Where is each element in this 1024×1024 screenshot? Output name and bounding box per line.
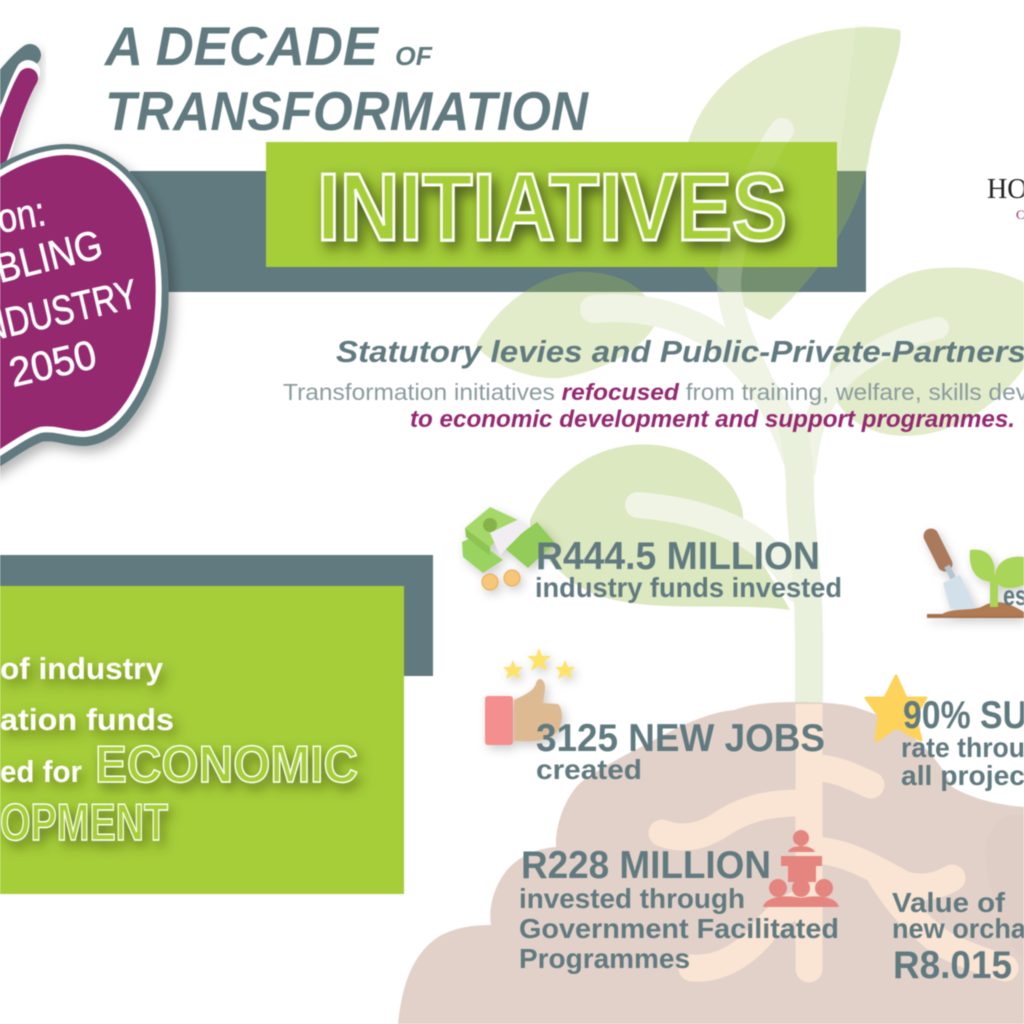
panel text xyxy=(0,651,358,852)
subtitle text xyxy=(283,334,1024,433)
icon: star xyxy=(866,676,926,741)
logo fragment xyxy=(987,174,1024,222)
stat: government programmes: R228 MILLION xyxy=(521,844,771,887)
apple text: 2050 xyxy=(5,331,101,396)
title: A Decade of Transformation xyxy=(103,15,589,142)
stat: industry funds: R444.5 MILLION xyxy=(536,535,820,578)
subtitle text: Transformation initiatives refocused from training, welfare, skills dev xyxy=(283,379,1024,405)
icon: thumbs up with stars xyxy=(485,648,575,745)
stat: success rate: all projec xyxy=(901,760,1024,791)
stat: new orchards value: R8.015 xyxy=(893,944,1012,987)
panel text: OPMENT xyxy=(0,794,168,852)
icon: money xyxy=(462,507,555,590)
stat: success rate xyxy=(901,694,1024,791)
panel text: ed for xyxy=(0,754,82,789)
stat: new orchards value: Value of xyxy=(892,887,1006,918)
stat: government programmes: Programmes xyxy=(519,943,690,974)
apple body xyxy=(0,154,159,462)
title: A Decade of Transformation: TRANSFORMATION xyxy=(105,80,589,142)
stat: new jobs: created xyxy=(536,754,642,785)
stat: industry funds: industry funds invested xyxy=(535,572,842,603)
subtitle text: Statutory levies and Public-Private-Partners xyxy=(336,334,1024,369)
banner: initiatives xyxy=(130,142,866,292)
panel text: of industry xyxy=(0,651,164,686)
stat: industry funds xyxy=(535,535,842,603)
stat: government programmes xyxy=(519,844,839,974)
stat: new jobs xyxy=(536,717,825,785)
soil mound xyxy=(398,702,1024,1024)
subtitle text: to economic development and support programmes. xyxy=(410,406,1015,433)
plant leaves background xyxy=(476,24,1024,705)
panel: economic development xyxy=(0,555,433,894)
stat: new orchards value xyxy=(892,887,1024,987)
icon: spade and seedling xyxy=(927,536,1024,618)
stat: government programmes: invested through xyxy=(519,883,745,914)
plant tint over teal bar xyxy=(526,171,866,292)
plant roots xyxy=(662,704,1005,969)
plant tint over green box xyxy=(719,142,788,267)
apple stem xyxy=(0,55,30,155)
title: A Decade of Transformation: OF xyxy=(395,41,433,71)
stat: government programmes: Government Facilitated xyxy=(519,913,839,944)
banner heading: INITIATIVES xyxy=(317,154,787,261)
stat: new jobs: 3125 NEW JOBS xyxy=(536,717,825,760)
title: A Decade of Transformation: A DECADE xyxy=(103,15,380,77)
apple badge xyxy=(0,55,159,462)
apple text xyxy=(0,188,142,396)
panel text: ation funds xyxy=(0,702,174,737)
panel text: ECONOMIC xyxy=(95,736,358,794)
icon: speaker at podium xyxy=(763,830,839,907)
